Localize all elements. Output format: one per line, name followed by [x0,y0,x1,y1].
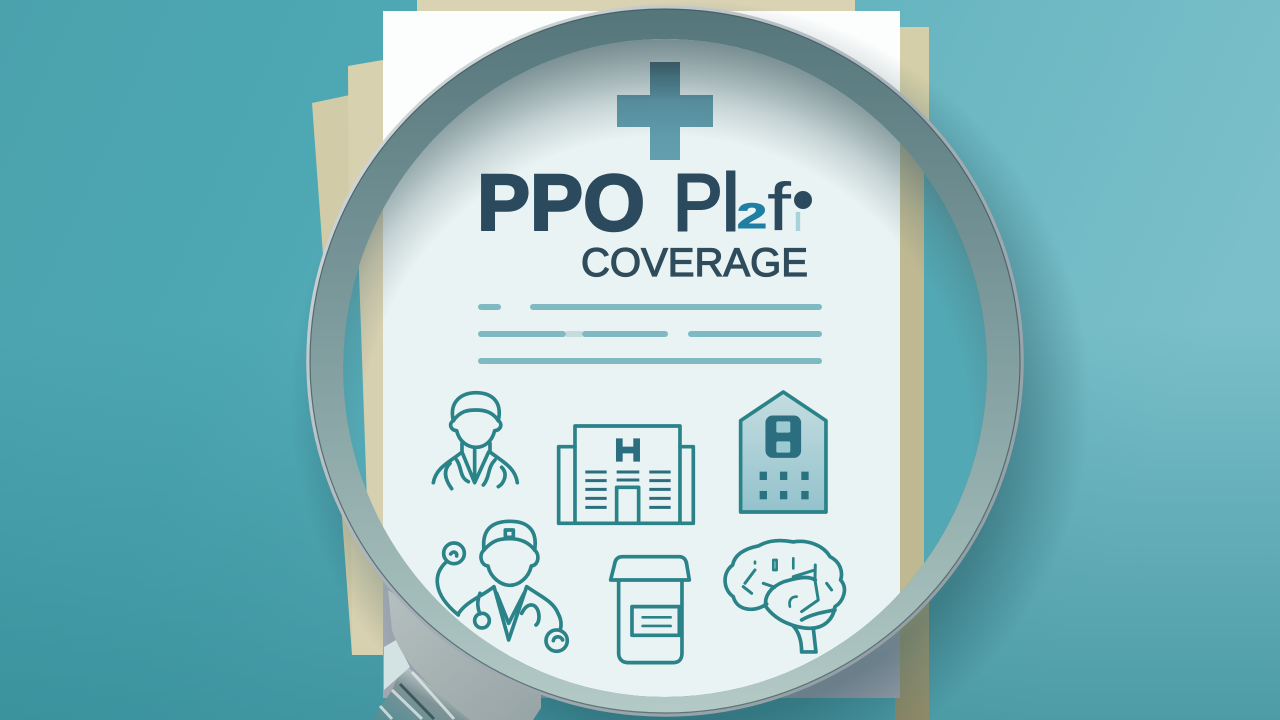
lens band [307,6,1023,716]
paper: top beige sheet [417,0,855,14]
subtitle: coverage: COVERAGE [581,241,808,285]
icon: clinic building [741,392,826,512]
plus sign [617,62,713,160]
icons [433,392,844,663]
beige sheet seen through lens, left [358,208,384,528]
handle [372,664,472,720]
title: PPO Plan: PPO [477,158,645,247]
title: PPO Plan: Pl [673,158,739,247]
title: PPO Plan: 2 [737,197,767,236]
icon: brain [725,541,844,652]
paper: right beige sheet [895,27,929,720]
rim dark line [310,9,1020,713]
title: PPO Plan: ı [794,201,802,237]
stack of papers [312,0,929,720]
icon: hospital building [559,426,693,523]
title: PPO Plan: f [767,169,791,245]
lens background [340,30,990,700]
icon: medicine bottle [611,557,689,663]
document page seen through lens [383,30,900,700]
text placeholder lines [478,304,822,364]
icon: doctor with stethoscope [437,521,567,651]
title: PPO Plan [481,170,812,232]
paper: white front sheet [383,11,900,698]
lens collar [388,590,541,720]
lens shadow on surface [290,0,1090,720]
paper: left beige sheet [348,60,384,655]
paper scrap beside collar [384,640,410,690]
lens rim [308,7,1022,715]
inner lens shading [343,39,987,402]
paper: tilted back sheet [312,95,372,655]
magnifying lens view [340,30,990,700]
magnifying glass frame [307,6,1023,716]
icon: doctor with cap [433,393,517,489]
beige sheet seen through lens, right [895,138,924,598]
